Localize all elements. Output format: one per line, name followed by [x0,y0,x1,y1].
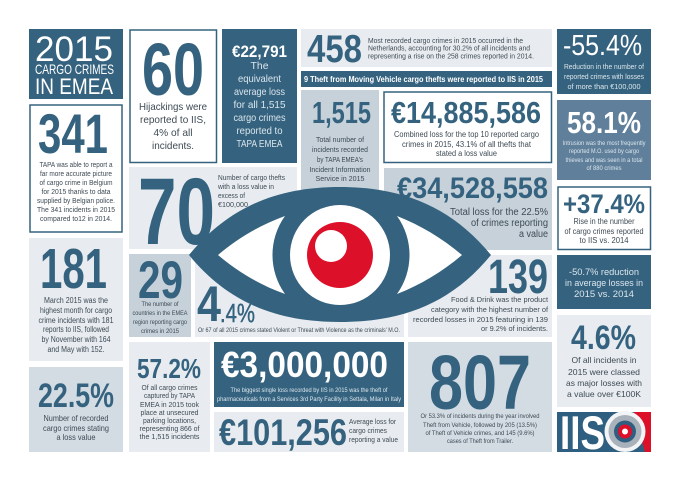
panel: 4.4% violence: 4 [197,276,221,332]
logo: IIS [557,406,651,459]
panel: -55.4%: Reduction in the number of [564,62,645,71]
panel: 4.6%: Of all incidents in [572,355,637,365]
panel: 29 countries: countries in the EMEA [132,311,188,317]
panel: 57.2% unsecured parking: the 1,515 incidents [140,434,200,441]
panel: 807 theft from vehicle: cases of Theft from Trailer. [447,438,513,445]
panel: euro 14,885,586: crimes in 2015, 43.1% of all thefts that [402,140,532,149]
panel: euro 22,791: average loss [234,86,285,98]
panel: 458 Netherlands: Netherlands, accounting for 30.2% of all incidents and [368,46,530,52]
panel: euro 14,885,586: €14,885,586 [391,95,541,130]
panel: 458 Netherlands: Most recorded cargo crimes in 2015 occurred in the [368,38,523,45]
panel: 139 food and drink: category with the highest number of [431,305,549,314]
panel: 1,515 incidents: 1,515 [312,95,371,130]
panel: euro 3,000,000 [214,342,404,407]
panel: 181 March 2015: March 2015 was the [44,296,108,305]
panel: euro 101,256: cargo crimes [349,426,387,435]
panel: 58.1%: Intrusion was the most frequently [562,141,646,147]
panel: 57.2% unsecured parking: place at unsecured [140,410,199,417]
panel: euro 101,256: €101,256 [219,412,347,453]
panel: 4.4% violence: Or 67 of all 2015 crimes stated Violent or Threat with Violence as the criminals' M.O. [198,328,400,334]
panel: +37.4%: +37.4% [563,189,645,219]
panel: 29 countries: 29 [138,251,183,310]
panel: euro 3,000,000: pharmaceuticals from a Services 3rd Party Facility in Settala, Milan in Italy [217,396,402,403]
panel: 181 March 2015: crime incidents with 181 [38,316,114,325]
panel: 57.2% unsecured parking: Of all cargo crimes [142,385,198,392]
panel: 57.2% unsecured parking: parking locations, [143,418,196,425]
panel: 4.4% violence [195,254,404,337]
panel: -55.4%: of more than €100,000 [568,82,640,91]
panel: euro 34,528,558: a value [519,229,548,240]
panel: 70 thefts over 100k: excess of [218,191,246,200]
panel: euro 22,791: The [250,60,269,72]
icon: central eye [189,187,491,322]
panel: -55.4%: -55.4% [563,30,642,62]
panel: 70 thefts over 100k: 70 [138,159,215,265]
panel: 58.1%: of 880 crimes [586,166,622,172]
panel: 1,515 incidents: by TAPA EMEA's [317,157,363,164]
panel: 4.6%: a value over €100K [567,389,641,399]
panel: 139 food and drink: recorded losses in 2015 featuring in 139 [413,315,548,324]
panel: 341 Belgium: for 2015 thanks to data [42,189,111,196]
panel: 1,515 incidents: Incident Information [310,167,371,174]
panel: euro 3,000,000: The biggest single loss recorded by IIS in 2015 was the theft of [230,387,388,394]
panel: 57.2% unsecured parking: representing 866 of [140,426,200,433]
panel: 181 March 2015 [29,237,123,361]
banner: theft from moving vehicle [301,71,552,87]
panel: 22.5%: a loss value [56,432,96,442]
panel: euro 14,885,586: stated a loss value [436,149,498,158]
panel: euro 34,528,558: €34,528,558 [397,172,548,205]
panel: euro 101,256: reporting a value [349,435,398,444]
panel: 341 Belgium: compared to12 in 2014. [40,216,112,223]
panel: 139 food and drink [408,251,552,337]
panel: 341 Belgium: The 341 incidents in 2015 [37,207,115,214]
panel: +37.4%: Rise in the number [574,217,635,226]
title panel [29,29,123,99]
panel: 139 food and drink: or 9.2% of incidents. [481,324,548,333]
panel: 57.2% unsecured parking: EMEA in 2015 took [140,402,199,409]
panel: 60 hijackings: 4% of all [154,127,192,139]
panel: 70 thefts over 100k: €100,000 [218,200,248,209]
panel: 1,515 incidents: Total number of [316,137,364,144]
panel: +37.4%: to IIS vs. 2014 [580,236,629,245]
panel: 139 food and drink: Food & Drink was the product [451,295,549,304]
banner: theft from moving vehicle: 9 Theft from Moving Vehicle cargo thefts were reported to IIS in 2015 [304,74,543,84]
panel: euro 34,528,558: Total loss for the 22.5% [450,207,548,218]
panel: -50.7%: -50.7% reduction [569,267,639,277]
panel: +37.4%: of cargo crimes reported [564,227,644,236]
panel: euro 14,885,586 [384,92,552,162]
panel: euro 34,528,558 [384,168,552,250]
panel: +37.4% [558,187,650,250]
panel: 70 thefts over 100k: with a loss value in [217,182,274,191]
panel: 341 Belgium: 341 [38,102,108,165]
panel: euro 3,000,000: €3,000,000 [221,344,388,385]
panel: 807 theft from vehicle [408,340,552,452]
panel: 181 March 2015: 181 [40,237,107,301]
title panel: 2015 [35,30,113,69]
panel: euro 14,885,586: Combined loss for the top 10 reported cargo [394,130,539,139]
panel: 60 hijackings: 60 [142,28,204,111]
panel: 57.2% unsecured parking [129,342,210,452]
panel: -50.7%: 2015 vs. 2014 [574,289,634,299]
panel: 181 March 2015: and May with 152. [48,345,104,354]
panel: euro 22,791: equivalent [238,73,281,85]
panel: 4.6%: as major losses with [566,378,642,388]
panel: 60 hijackings: incidents. [152,140,194,152]
panel: 22.5%: cargo crimes stating [43,423,109,433]
panel: 181 March 2015: reports to IIS, followed [43,325,109,334]
panel: 29 countries [129,251,191,337]
panel: euro 22,791: reported to [236,125,283,137]
panel: 1,515 incidents [301,90,379,200]
panel: 22.5% [29,367,123,452]
logo: IIS: IIS [560,406,605,459]
panel: 29 countries: The number of [142,302,179,308]
panel: euro 34,528,558: of crimes reporting [471,218,548,229]
panel: euro 22,791 [222,29,297,163]
panel: 58.1%: 58.1% [567,105,641,140]
panel: -55.4%: reported crimes with losses [564,72,644,81]
panel: 4.4% violence: .4% [220,298,255,328]
panel: 29 countries: region reporting cargo [133,320,188,326]
panel: 181 March 2015: by November with 164 [42,335,111,344]
panel: euro 22,791: for all 1,515 [234,99,286,111]
panel: 458 Netherlands [301,28,552,71]
panel: 4.6%: 2015 were classed [568,367,640,377]
panel: euro 22,791: TAPA EMEA [236,138,282,150]
panel: 70 thefts over 100k [129,159,297,265]
panel: 60 hijackings: Hijackings were [139,101,207,113]
panel: euro 22,791: cargo crimes [234,112,286,124]
panel: 58.1%: reported M.O. used by cargo [569,149,640,155]
panel: 58.1% [557,100,651,180]
panel: -55.4% [557,29,651,94]
panel: 22.5%: 22.5% [38,377,114,415]
title panel: IN EMEA [35,74,113,99]
panel: 139 food and drink: 139 [488,251,548,304]
panel: -50.7% [557,255,651,309]
title panel: CARGO CRIMES [35,61,114,77]
panel: 4.6%: 4.6% [571,319,636,357]
panel: 341 Belgium [30,102,122,232]
panel: 58.1%: thieves and was seen in a total [566,158,642,164]
panel: 341 Belgium: TAPA was able to report a [40,162,113,169]
panel: 22.5%: Number of recorded [44,413,109,423]
panel: 60 hijackings: reported to IIS, [140,114,206,126]
panel: 1,515 incidents: Service in 2015 [316,176,365,183]
panel: -50.7%: in average losses in [565,278,643,288]
panel: 4.6% [557,315,651,407]
panel: 807 theft from vehicle: 807 [429,340,531,426]
panel: 57.2% unsecured parking: 57.2% [137,353,201,384]
panel: 458 Netherlands: 458 [307,28,362,71]
panel: 70 thefts over 100k: Number of cargo thefts [218,173,285,182]
panel: 341 Belgium: of cargo crime in Belgium [40,180,113,187]
panel: 29 countries: crimes in 2015 [141,329,180,335]
panel: 807 theft from vehicle: of Theft of Vehicle crimes, and 145 (9.6%) [426,430,534,437]
panel: euro 101,256: Average loss for [349,417,396,426]
panel: 341 Belgium: far more accurate picture [40,171,112,178]
panel: 807 theft from vehicle: Theft from Vehicle, followed by 205 (13.5%) [423,422,537,429]
panel: euro 22,791: €22,791 [232,42,287,61]
panel: 341 Belgium: supplied by Belgian police. [37,198,115,205]
panel: 458 Netherlands: representing a rise on the 258 crimes reported in 2014. [368,54,534,60]
panel: 60 hijackings [130,28,216,162]
panel: 1,515 incidents: incidents recorded [312,147,368,154]
panel: 807 theft from vehicle: Or 53.3% of incidents during the year involved [420,413,540,420]
panel: 181 March 2015: highest month for cargo [40,306,112,315]
panel: 57.2% unsecured parking: captured by TAPA [144,393,195,400]
